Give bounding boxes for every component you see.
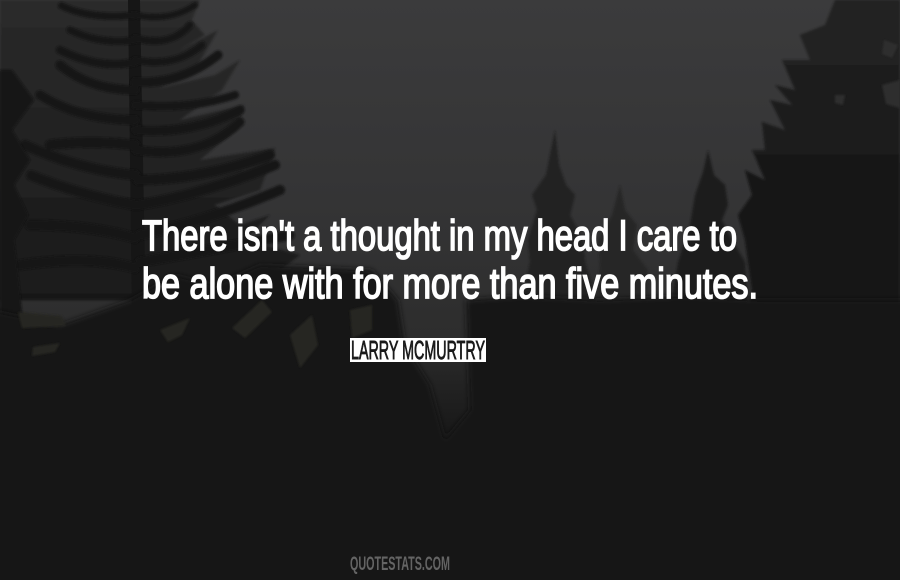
watermark: QUOTESTATS.COM xyxy=(350,554,450,575)
right fir mist patches xyxy=(835,40,900,108)
quote line 2: be alone with for more than five minutes. xyxy=(142,260,758,308)
forest foreground xyxy=(0,265,900,580)
foliage highlights xyxy=(18,300,372,368)
tree: right fir mass xyxy=(738,0,900,340)
left fir branches xyxy=(20,5,290,268)
author name: LARRY MCMURTRY xyxy=(351,335,485,365)
quote text xyxy=(142,212,758,308)
distant tree: centre xyxy=(520,130,600,310)
left fir crown xyxy=(0,0,300,300)
author badge xyxy=(350,335,486,365)
tree: large left fir xyxy=(0,0,300,330)
quote line 1: There isn't a thought in my head I care to xyxy=(142,212,737,260)
distant tree: centre right small xyxy=(595,185,648,310)
second left fir xyxy=(0,70,34,330)
left fir trunk xyxy=(128,0,146,320)
distant tree: right of centre xyxy=(670,150,748,310)
